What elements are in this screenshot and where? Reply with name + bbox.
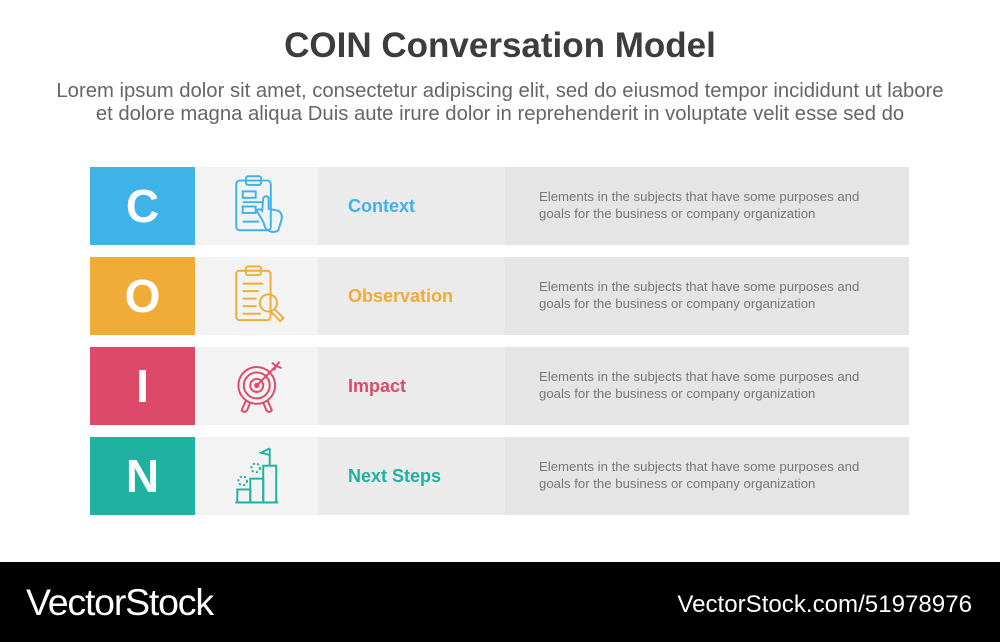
row: context <box>90 167 909 245</box>
label <box>318 257 505 335</box>
icon: clipboard with magnifier <box>195 257 318 335</box>
label: Impact <box>348 376 406 396</box>
title: COIN Conversation Model <box>284 26 716 65</box>
letter O: O <box>125 270 160 322</box>
description <box>505 347 909 425</box>
description: Elements in the subjects that have some purposes and <box>539 189 859 204</box>
label: Next Steps <box>348 466 441 486</box>
description <box>505 437 909 515</box>
row: impact <box>90 347 909 425</box>
letter I <box>90 347 195 425</box>
row: observation <box>90 257 909 335</box>
row: next steps <box>90 437 909 515</box>
label: Context <box>348 196 415 216</box>
subtitle: et dolore magna aliqua Duis aute irure dolor in reprehenderit in voluptate velit esse sed do <box>96 102 904 124</box>
label <box>318 347 505 425</box>
letter O <box>90 257 195 335</box>
description: goals for the business or company organization <box>539 296 815 311</box>
footer url: VectorStock.com/51978976 <box>677 591 972 618</box>
description: Elements in the subjects that have some purposes and <box>539 369 859 384</box>
letter C: C <box>126 180 159 232</box>
description: Elements in the subjects that have some purposes and <box>539 459 859 474</box>
description <box>505 257 909 335</box>
icon: steps with flag <box>195 437 318 515</box>
letter N <box>90 437 195 515</box>
description: Elements in the subjects that have some purposes and <box>539 279 859 294</box>
footer logo text: VectorStock <box>26 581 213 623</box>
description <box>505 167 909 245</box>
icon: clipboard with hand <box>195 167 318 245</box>
description: goals for the business or company organization <box>539 386 815 401</box>
letter C <box>90 167 195 245</box>
label <box>318 167 505 245</box>
letter N: N <box>126 450 159 502</box>
subtitle: Lorem ipsum dolor sit amet, consectetur adipiscing elit, sed do eiusmod tempor incididunt ut labore <box>56 80 944 102</box>
icon: target <box>195 347 318 425</box>
letter I: I <box>136 360 149 412</box>
label <box>318 437 505 515</box>
description: goals for the business or company organization <box>539 206 815 221</box>
subtitle <box>56 80 944 124</box>
footer watermark bar <box>0 562 1000 642</box>
description: goals for the business or company organization <box>539 476 815 491</box>
label: Observation <box>348 286 453 306</box>
